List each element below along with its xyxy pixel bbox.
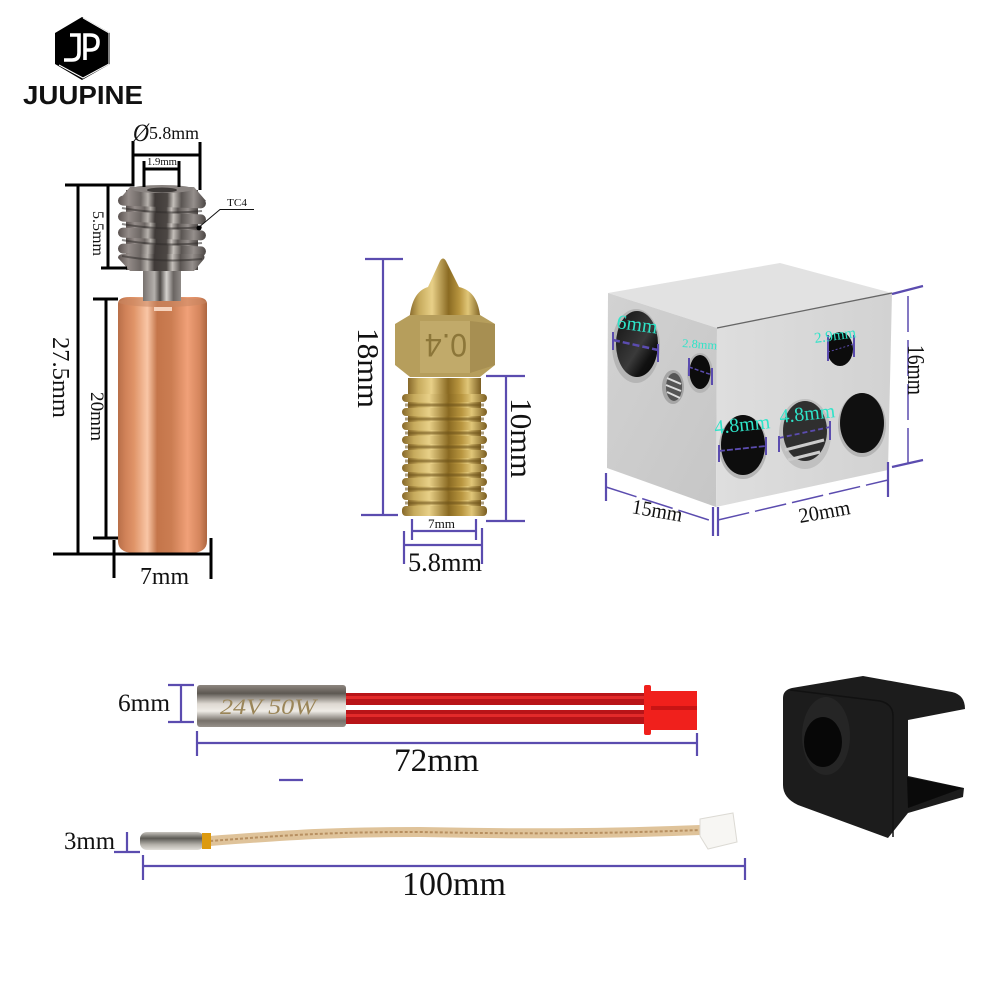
label: 100mm: 100mm [402,866,506,903]
hole dimension marks [613,332,854,462]
fibre wire [210,830,700,841]
label: 18mm: 18mm [351,328,386,408]
label: 5.5mm: 5.5mm [89,211,106,257]
label: 6mm: 6mm [118,690,171,717]
label: diameter symbol: Ø [132,120,150,147]
cartridge cylinder [197,685,346,727]
block body [607,263,892,507]
logo: JUUPINE [23,17,143,110]
hole labels: 6mm [615,311,659,339]
label: 20mm: 20mm [86,392,107,441]
sock nozzle ring [802,697,850,775]
label: 7mm: 7mm [140,564,189,590]
hole labels: 2.8mm [682,336,718,352]
hole labels: 2.9mm [813,325,857,347]
label: 10mm: 10mm [504,398,539,478]
metal probe [140,832,211,850]
label: 3mm: 3mm [64,828,116,855]
dimension lines [114,832,745,880]
cartridge cylinder: 24V 50W [220,694,318,719]
label: 16mm: 16mm [902,345,928,395]
holes [612,309,886,479]
panel: heater block [606,263,928,536]
brand name: JUUPINE [23,80,143,110]
label: 20mm: 20mm [797,495,852,528]
dimension lines [361,259,525,564]
titanium threads TC4 [118,185,206,271]
red connector [644,685,697,735]
copper heat sink [118,270,207,553]
label: 5.8mm: 5.8mm [149,123,199,143]
label: 7mm: 7mm [428,516,455,531]
dimension lines [606,286,923,536]
hole labels: 4.8mm [778,400,837,428]
label: 15mm: 15mm [630,494,685,527]
label: 1.9mm: 1.9mm [147,156,178,168]
panel: thermistor [64,813,745,903]
red wires [346,693,646,724]
white connector [700,813,737,849]
dimension lines [168,685,697,780]
dimension lines [53,141,254,579]
panel: brass nozzle [351,258,539,577]
label: 5.8mm: 5.8mm [408,548,482,577]
panel: silicone sock [783,676,965,838]
icon: JP hexagon [55,17,110,80]
nozzle body [395,258,495,516]
label: TC4: TC4 [227,197,248,209]
nozzle body: 0.4 [425,327,467,363]
label: 27.5mm: 27.5mm [47,337,74,418]
panel: heater cartridge [118,685,697,780]
panel: heat break [47,120,254,590]
hole labels [615,311,857,439]
hole labels: 4.8mm [713,411,772,439]
label: 72mm: 72mm [394,743,479,779]
